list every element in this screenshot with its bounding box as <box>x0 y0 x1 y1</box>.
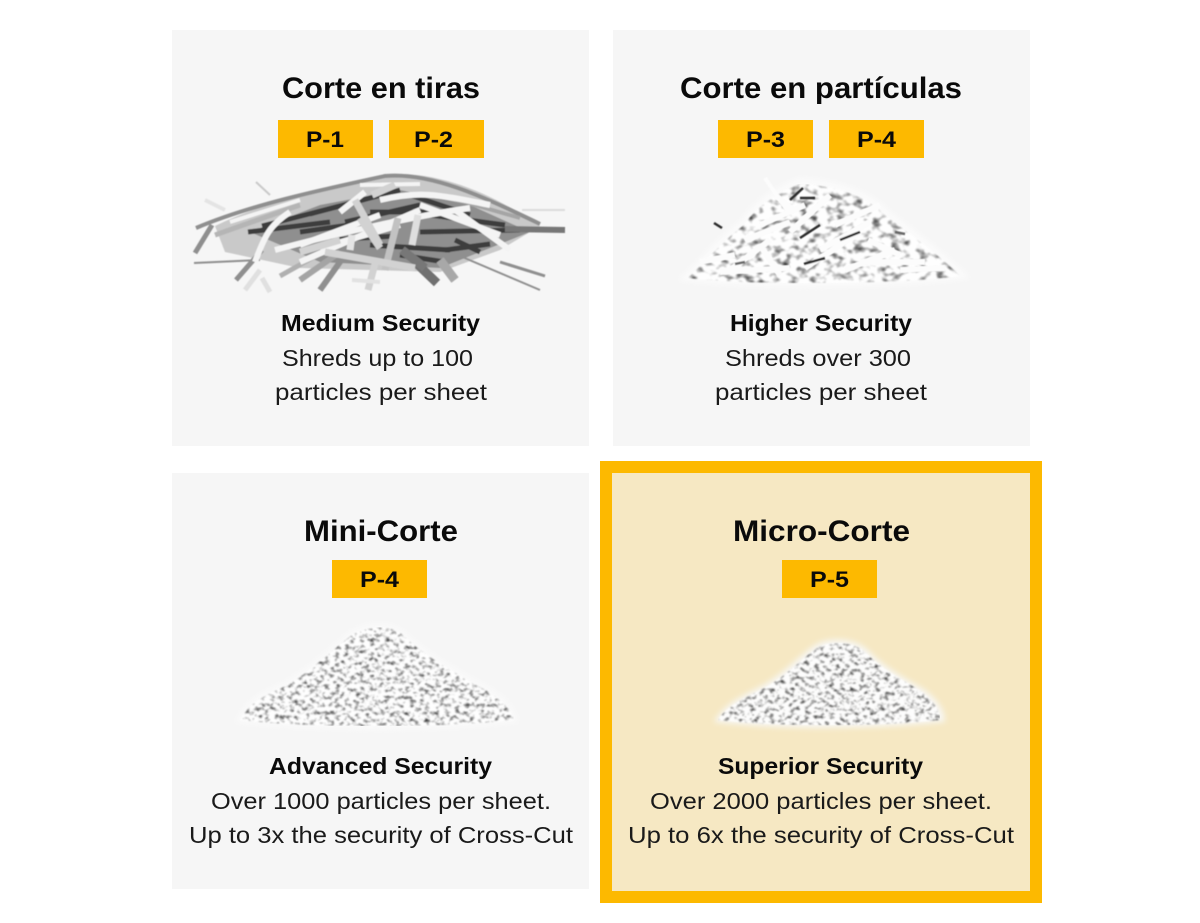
text: Shreds up to 100 particles per sheet: Shreds up to 100 <box>282 345 473 371</box>
text: Shreds up to 100 particles per sheet: particles per sheet <box>275 379 488 405</box>
heading: Micro-Corte: Micro-Corte <box>733 515 910 548</box>
badge: P-4 <box>332 560 427 598</box>
text: Shreds over 300 particles per sheet <box>715 345 928 405</box>
text: Over 1000 particles per sheet: Up to 3x the security of Cross-Cut <box>189 822 574 848</box>
heading: Corte en partículas: Corte en partículas <box>680 72 962 105</box>
text: Superior Security: Superior Security <box>718 753 923 779</box>
badge: P-2: P-2 <box>414 127 453 152</box>
illustration: micro-cut paper pile <box>714 639 945 728</box>
text: Higher Security: Higher Security <box>730 310 912 336</box>
badge: P-2 <box>389 120 484 158</box>
text: Shreds over 300 particles per sheet: particles per sheet <box>715 379 928 405</box>
badge: P-1: P-1 <box>306 127 344 152</box>
text: Over 2000 particles per sheet: Up to 6x the security of Cross-Cut <box>628 822 1015 848</box>
text: Advanced Security: Advanced Security <box>269 753 492 779</box>
badge: P-5: P-5 <box>810 567 849 592</box>
illustration: shredded paper particles <box>678 178 970 287</box>
text: Over 2000 particles per sheet: Over 2000 particles per sheet. <box>650 788 992 814</box>
panel: strip cut <box>172 30 589 446</box>
badge: P-4: P-4 <box>360 567 400 592</box>
text: Over 2000 particles per sheet <box>628 788 1015 848</box>
badge: P-3 <box>718 120 813 158</box>
badge: P-3: P-3 <box>746 127 785 152</box>
text: Over 1000 particles per sheet: Over 1000 particles per sheet. <box>211 788 551 814</box>
badge: P-1 <box>278 120 373 158</box>
panel: mini cut <box>172 473 589 889</box>
text: Over 1000 particles per sheet <box>189 788 574 848</box>
panel: particle cut <box>613 30 1030 446</box>
text: Shreds up to 100 particles per sheet <box>275 345 488 405</box>
illustration: mini-cut paper pile <box>236 624 518 730</box>
illustration: shredded paper strips <box>194 174 565 292</box>
text: Medium Security: Medium Security <box>281 310 480 336</box>
heading: Mini-Corte: Mini-Corte <box>304 515 458 548</box>
text: Shreds over 300 particles per sheet: Shreds over 300 <box>725 345 911 371</box>
panel: micro cut highlighted <box>606 467 1036 897</box>
badge: P-5 <box>782 560 877 598</box>
heading: Corte en tiras: Corte en tiras <box>282 72 480 105</box>
badge: P-4: P-4 <box>857 127 897 152</box>
badge: P-4 <box>829 120 924 158</box>
